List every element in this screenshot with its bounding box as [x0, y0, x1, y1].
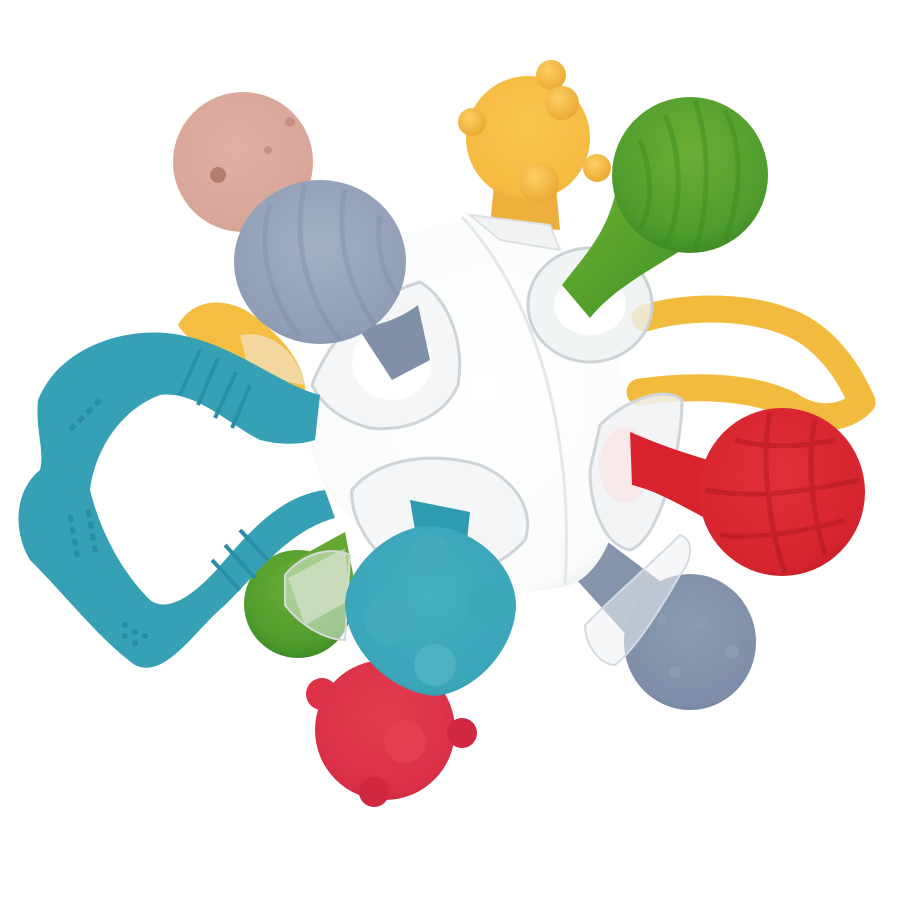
green small ball behind	[244, 532, 358, 658]
clear ring for grey stem	[312, 282, 460, 429]
grey-blue lower ball with stem	[575, 530, 756, 710]
green ball with stem	[562, 97, 768, 318]
clear ring for green stem	[528, 248, 652, 362]
white central body	[310, 215, 628, 592]
red ball with stem	[630, 408, 865, 576]
yellow textured ball	[458, 60, 611, 230]
grey-blue ball with stem	[234, 180, 430, 380]
teal stem and ball	[345, 500, 516, 696]
clear ring behind lower teal	[285, 551, 350, 640]
clear ring for teal stem	[352, 458, 528, 577]
clear ring for red stem	[590, 394, 682, 550]
rose red textured ball	[306, 660, 477, 807]
clear ring lower right	[585, 535, 690, 665]
pink ball	[173, 92, 313, 232]
yellow teether loop right	[640, 309, 862, 417]
yellow teether left	[178, 302, 305, 390]
teal teether loop left	[19, 333, 335, 668]
